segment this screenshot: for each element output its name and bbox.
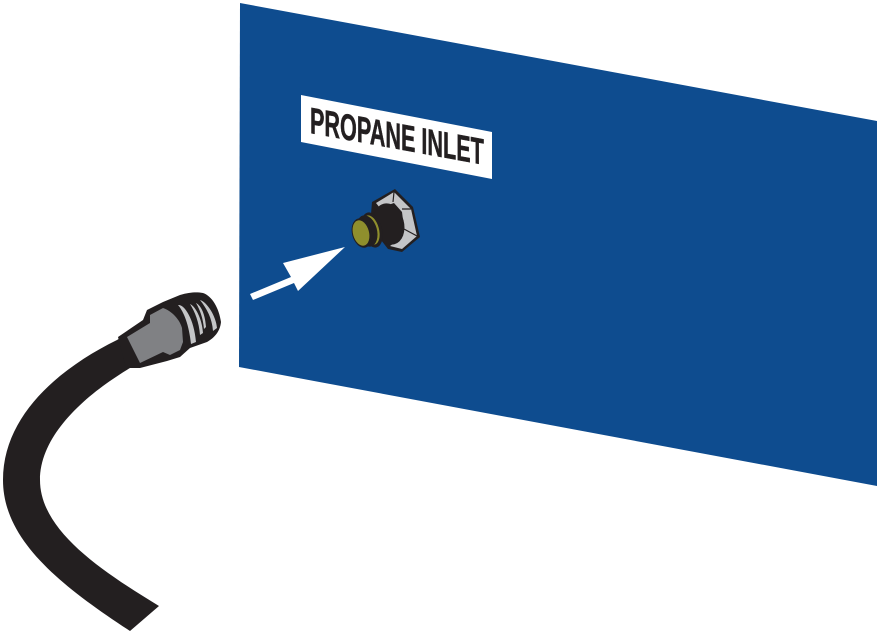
label: propane inlet: PROPANE INLET xyxy=(310,100,484,173)
icon: inlet fitting xyxy=(348,189,420,252)
arrow: toward inlet xyxy=(250,247,345,300)
hose: black flexible line xyxy=(3,335,159,631)
panel: blue appliance wall xyxy=(239,3,877,486)
icon: hose end connector xyxy=(118,292,221,368)
label: propane inlet xyxy=(301,95,492,179)
